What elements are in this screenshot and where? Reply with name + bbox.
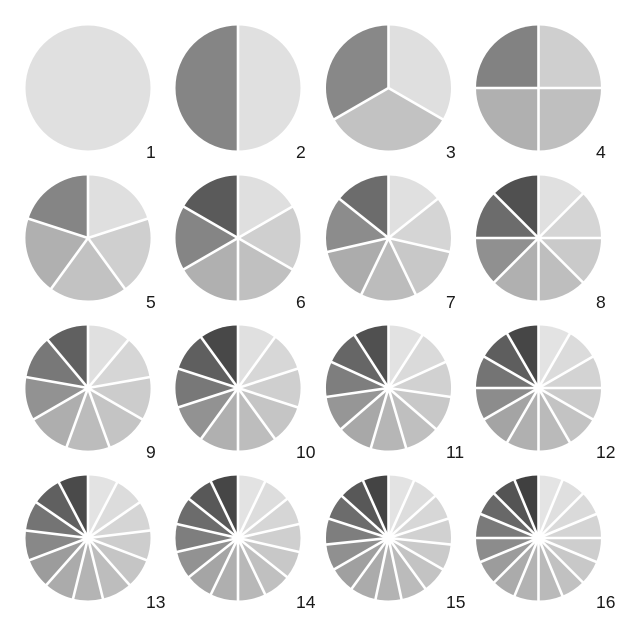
wedges	[27, 174, 149, 290]
pie 15	[325, 474, 465, 612]
wedges	[207, 24, 269, 152]
label 11: 11	[446, 442, 464, 462]
wedges	[177, 324, 299, 452]
pie 14	[176, 474, 316, 612]
label 16: 16	[596, 592, 615, 612]
wedges	[474, 324, 602, 452]
label 6: 6	[296, 292, 306, 312]
wedges	[474, 24, 602, 152]
label 3: 3	[446, 142, 456, 162]
label 8: 8	[596, 292, 606, 312]
full circle	[26, 26, 150, 150]
pie 11	[325, 324, 464, 462]
pie 16	[474, 474, 615, 612]
label 10: 10	[296, 442, 316, 462]
wedges	[183, 174, 293, 302]
label 14: 14	[296, 592, 316, 612]
pie 12	[474, 324, 615, 462]
label 7: 7	[446, 292, 456, 312]
wedges	[333, 24, 444, 131]
label 12: 12	[596, 442, 615, 462]
label 1: 1	[146, 142, 156, 162]
wedges	[176, 474, 300, 602]
pie 3	[333, 24, 456, 162]
label 5: 5	[146, 292, 156, 312]
pie 7	[326, 174, 456, 312]
wedges	[474, 474, 602, 602]
wedges	[25, 324, 151, 448]
label 2: 2	[296, 142, 306, 162]
wedges	[326, 174, 451, 296]
pie 1	[26, 26, 156, 162]
wedges	[474, 174, 602, 302]
pie 4	[474, 24, 606, 162]
pie 8	[474, 174, 606, 312]
wedges	[325, 324, 452, 449]
label 13: 13	[146, 592, 165, 612]
label 4: 4	[596, 142, 606, 162]
pie 5	[27, 174, 156, 312]
wedges	[24, 474, 152, 600]
pie 10	[177, 324, 316, 462]
pie 13	[24, 474, 165, 612]
pie 2	[207, 24, 306, 162]
pie 6	[183, 174, 306, 312]
label 15: 15	[446, 592, 465, 612]
wedges	[325, 474, 452, 601]
label 9: 9	[146, 442, 156, 462]
pie 9	[25, 324, 156, 462]
